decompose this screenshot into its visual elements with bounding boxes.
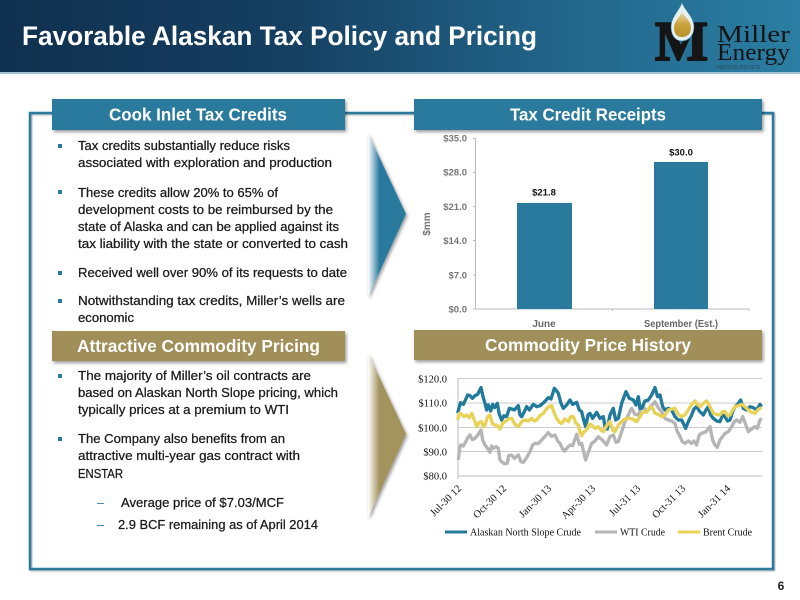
text block: tax credit bullets: development costs to be reimbursed by the [78,203,333,217]
legend: WTI Crude [620,528,665,538]
y axis title: $mm [422,212,433,236]
text block: commodity bullets: The majority of Miller’s oil contracts are [78,369,311,383]
x axis labels: Oct-31 13 [650,483,688,521]
heading: Commodity Price History: Commodity Price History [485,335,691,355]
y axis labels: $80.0 [423,472,447,482]
logo: Miller Energy [655,2,790,73]
logo: Miller Energy: M [655,11,708,73]
y axis labels: $35.0 [443,134,467,144]
text block: commodity bullets: – [97,518,104,532]
y axis labels [443,134,467,316]
series: Brent Crude [458,401,762,436]
heading: Commodity Price History [414,330,762,360]
category label: September: September (Est.) [644,319,718,330]
legend: Alaskan North Slope Crude [470,528,581,538]
logo: Miller Energy: RESOURCES [717,65,760,71]
x axis labels: Jan-31 14 [696,483,734,520]
text block: tax credit bullets: Tax credits substantially reduce risks [78,139,290,153]
y axis labels: $110.0 [418,398,447,410]
bar: September [654,162,708,309]
panel frame [30,113,773,569]
y axis labels: $100.0 [418,424,447,434]
line chart: commodity price history [418,374,762,538]
bar: June [517,203,572,309]
title: Favorable Alaskan Tax Policy and Pricing [22,21,537,51]
text block: commodity bullets: The Company also benefits from an [78,432,285,446]
logo: Miller Energy: Energy [717,40,790,66]
text block: tax credit bullets: state of Alaska and can be applied against its [78,220,339,234]
x axis labels: Jul-31 13 [608,483,643,519]
x axis labels: Jan-30 13 [517,483,554,520]
arrow: blue [368,133,406,297]
text block: commodity bullets: attractive multi-year gas contract with [78,449,300,463]
text block: tax credit bullets: economic [78,311,134,325]
logo: Miller Energy: Miller [717,22,790,48]
y axis labels: $14.0 [443,236,467,247]
arrow: gold [368,353,406,518]
text block: commodity bullets: based on Alaskan North Slope pricing, which [78,386,338,400]
x axis labels: Oct-30 12 [471,483,509,521]
page number: 6 [778,579,785,593]
heading: Cook Inlet Tax Credits [52,99,345,130]
text block: tax credit bullets: Notwithstanding tax credits, Miller’s wells are [78,294,345,308]
text block: tax credit bullets: associated with exploration and production [78,156,332,170]
series: Alaskan North Slope Crude [458,388,762,429]
text block: tax credit bullets: These credits allow 20% to 65% of [78,186,279,200]
text block: tax credit bullets: Received well over 90% of its requests to date [78,266,347,280]
category label: June: June [532,319,556,330]
y axis labels: $90.0 [423,448,447,458]
title bar [0,0,800,74]
y axis labels: $21.0 [443,202,467,213]
bar chart: tax credit receipts [422,134,749,330]
heading: Tax Credit Receipts [414,99,762,130]
text block: commodity bullets: – [97,496,104,510]
y axis labels: $28.0 [443,168,467,178]
heading: Attractive Commodity Pricing: Attractive Commodity Pricing [77,336,320,356]
text block: tax credit bullets: tax liability with the state or converted to cash [78,237,348,251]
heading: Tax Credit Receipts: Tax Credit Receipts [510,104,666,124]
y axis labels: $7.0 [448,270,467,282]
series: WTI Crude [458,402,762,464]
heading: Cook Inlet Tax Credits: Cook Inlet Tax Credits [109,104,287,124]
text block: commodity bullets: ENSTAR [78,467,123,481]
heading: Attractive Commodity Pricing [52,331,345,361]
y axis labels [418,374,447,482]
x axis labels: Apr-30 13 [560,483,598,522]
text block: commodity bullets: Average price of $7.03/MCF [121,496,284,510]
text block: commodity bullets: 2.9 BCF remaining as of April 2014 [118,518,318,532]
text block: tax credit bullets [58,139,348,325]
legend [445,528,752,538]
x axis labels [429,483,734,522]
text block: commodity bullets: typically prices at a premium to WTI [78,403,289,417]
text block: commodity bullets [58,369,338,532]
y axis labels: $120.0 [418,374,447,386]
value label: September: $30.0 [669,148,693,158]
icon: flame [671,2,694,41]
legend: Brent Crude [703,528,752,538]
y axis labels: $0.0 [448,304,467,316]
value label: June: $21.8 [532,188,556,198]
x axis labels: Jul-30 12 [429,483,464,519]
